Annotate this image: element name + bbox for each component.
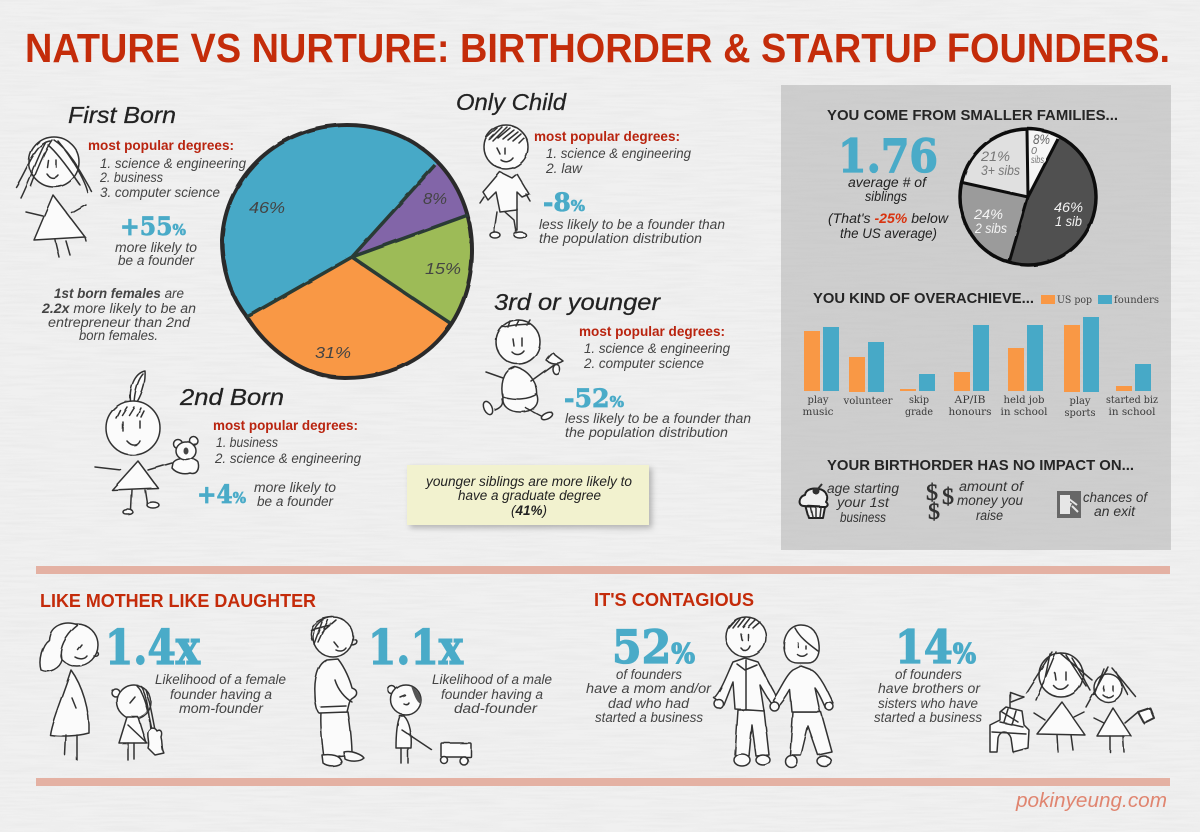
text: average siblings: (That's -25% below [828,211,949,226]
text: degrees list: 2. law [545,161,583,176]
icon: boy and girl holding hands [714,617,833,767]
icon: dollar signs: $ [928,499,940,524]
text: parents: of founders [616,667,682,682]
icon: first born girl [16,137,92,257]
text: parents: dad who had [608,696,690,711]
icon: crawling baby [481,320,563,421]
heading: it's contagious: IT'S CONTAGIOUS [594,590,754,610]
bar labels: music [802,407,834,418]
callout: graduate degree note: younger siblings are more likely to [425,474,632,489]
text: siblings: started a business [874,710,982,725]
text: female founder: mom-founder [179,701,264,716]
text: degrees list: 2. science & engineering [214,451,361,466]
icon: sisters with sandcastle [990,652,1154,752]
text: more likely [254,480,336,509]
panel: like mother like daughter [40,591,552,766]
text: male founder: founder having a [441,687,543,702]
stat: +55%: +55% [120,212,186,241]
chart: sibling pie [958,126,1098,268]
pie label: 8% 0 sibs: 8% [1033,132,1050,147]
subheading: degrees: most popular degrees: [534,128,680,144]
icon: dollar signs [926,480,954,524]
bar labels: in school [1108,407,1156,418]
heading: only child: Only Child [456,89,567,115]
bar labels: in school [1000,407,1048,418]
panel: smaller families [827,107,1118,280]
icon: exit sign [1057,491,1081,518]
text: age starting [827,481,900,525]
icon: second born girl with koala [95,371,199,514]
bar labels: AP/IB [953,395,986,406]
text: female founder: founder having a [170,687,272,702]
text: degrees list: 2. computer science [583,356,704,371]
text: siblings: have brothers or [878,681,981,696]
text: amount of money [957,479,1024,523]
panel: overachieve [802,290,1159,419]
pie label: 31%: 31% [315,345,351,362]
bar labels: held job [1004,395,1044,406]
heading: 3rd or younger: 3rd or younger [494,289,661,315]
pie label: 24% 2 sibs [973,207,1007,236]
text: female founder: Likelihood of a female [155,672,286,687]
panel: grey sidebar background [781,85,1171,550]
pie label: 46% 1 sib [1054,200,1083,229]
stat: 1.1x: 1.1x [368,620,463,676]
panel: no impact [800,457,1148,525]
heading: first born: First Born [68,102,176,128]
subheading: degrees: most popular degrees: [213,417,358,433]
bar labels: skip [909,395,929,406]
text: less likely [565,411,751,440]
legend: US pop [1057,295,1092,306]
stat: 1.4x: 1.4x [105,620,200,676]
pie label: 24% 2 sibs: 2 sibs [974,221,1007,236]
credit: pokinyeung.com: pokinyeung.com [1015,790,1167,812]
text: 1st born females [41,286,196,343]
chart: birth order pie [220,123,474,380]
pie label: 15%: 15% [425,261,461,278]
heading: no impact: YOUR BIRTHORDER HAS NO IMPACT ON... [827,457,1134,474]
text: degrees list [99,156,246,200]
text: degrees list: 1. science & engineering [100,156,246,171]
text: degrees list: 2. business [99,170,163,185]
legend: founders [1114,295,1159,306]
text: parents: have a mom and/or [586,681,712,696]
bar labels: sports [1064,408,1096,419]
panel: first born [16,102,246,343]
bar labels: grade [905,407,933,418]
pie label: 46% 1 sib: 46% [1054,200,1083,215]
text: siblings: sisters who have [878,696,978,711]
text: more likely: more likely to [115,240,197,255]
callout: graduate degree note [407,465,649,525]
text: more likely: more likely to [254,480,336,495]
text: less likely: less likely to be a founder than [539,217,725,232]
heading: smaller families: YOU COME FROM SMALLER FAMILIES... [827,107,1118,124]
text: chances of exit: chances of [1083,490,1148,505]
text: age starting: your 1st [836,495,890,510]
text: degrees list: 1. business [216,435,278,450]
bar labels: play [1070,396,1091,407]
text: parents [586,667,712,725]
text: degrees list: 3. computer science [100,185,220,200]
icon: father and son with wagon [311,617,471,766]
text: 1st born females: born females. [79,328,158,343]
text: amount of money: money you [957,493,1023,508]
text: average siblings: the US average) [840,226,937,241]
stat: 52%: 52% [612,620,695,674]
text: less likely: the population distribution [565,425,728,440]
pie label: 8% 0 sibs: sibs [1031,155,1044,166]
legend [1041,295,1159,306]
text: male founder: Likelihood of a male [432,672,552,687]
heading: 2nd born: 2nd Born [179,384,284,410]
text: parents: started a business [595,710,703,725]
text: degrees list: 1. science & engineering [584,341,730,356]
text: siblings: of founders [895,667,962,682]
text: degrees list [583,341,730,371]
text: less likely [539,217,725,246]
icon: mother and daughter [40,623,164,760]
stat: 14%: 14% [895,620,976,674]
text: male founder [432,672,552,716]
stat: +4%: +4% [197,480,246,509]
text: female founder [155,672,286,716]
icon: only child boy [480,125,530,238]
text: 1st born females: 1st born females are [54,286,184,301]
heading: overachieve: YOU KIND OF OVERACHIEVE... [813,290,1034,307]
stat: 1.76: 1.76 [838,129,938,183]
text: average siblings [828,175,949,241]
pie label: 46% 1 sib: 1 sib [1055,214,1082,229]
pie label: 8% 0 sibs [1031,132,1050,166]
pie label: 8%: 8% [423,191,447,208]
text: chances of exit [1083,490,1148,519]
icon: dollar signs: $ [926,480,938,505]
text: degrees list [545,146,691,176]
bar labels: honours [948,407,992,418]
panel: third or younger [481,289,751,440]
pie label: 46%: 46% [249,200,285,217]
bar labels [802,395,1158,419]
text: siblings [874,667,982,725]
text: age starting: age starting [827,481,900,496]
bar labels: started biz [1106,395,1158,406]
pie label: 8% 0 sibs: 0 [1031,146,1037,157]
icon: cupcake [800,484,828,518]
text: amount of money: raise [976,508,1003,523]
text: degrees list: 1. science & engineering [546,146,691,161]
callout: graduate degree note: have a graduate degree [458,488,601,503]
subheading: degrees: most popular degrees: [579,323,725,339]
text: more likely [115,240,197,268]
text: less likely: the population distribution [539,231,702,246]
text: male founder: dad-founder [454,701,538,716]
text: less likely: less likely to be a founder than [565,411,751,426]
panel: it's contagious [586,590,1154,767]
heading: like mother like daughter: LIKE MOTHER LIKE DAUGHTER [40,591,316,611]
text: age starting: business [840,510,886,525]
subheading: degrees: most popular degrees: [88,137,234,153]
bar labels: volunteer [842,396,893,407]
icon: dollar signs: $ [942,484,954,509]
text: average siblings: siblings [865,189,907,204]
bar labels: play [808,395,829,406]
text: 1st born females: entrepreneur than 2nd [48,315,191,330]
pie label: 21% 3+ sibs: 21% [980,149,1010,164]
pie label: 21% 3+ sibs: 3+ sibs [981,163,1020,178]
text: amount of money: amount of [959,479,1024,494]
pie label: 24% 2 sibs: 24% [973,207,1003,222]
callout: graduate degree note: (41%) [511,503,547,518]
panel: second born [95,371,361,514]
chart: bars [804,317,1151,392]
text: more likely: be a founder [257,494,334,509]
stat: -8%: -8% [543,188,585,217]
panel: only child [456,89,725,246]
text: 1st born females: 2.2x more likely to be an [41,301,196,316]
stat: -52%: -52% [564,384,624,413]
text: average siblings: average # of [848,175,927,190]
text: chances of exit: an exit [1094,504,1136,519]
text: degrees list [214,435,361,466]
text: more likely: be a founder [118,253,195,268]
pie label: 21% 3+ sibs [980,149,1020,178]
